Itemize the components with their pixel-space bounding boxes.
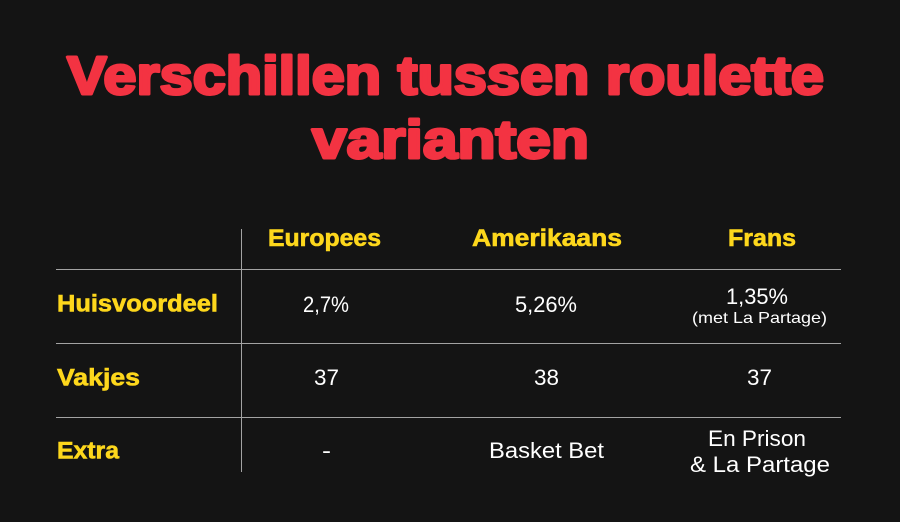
row: vakjes values: 37 xyxy=(314,365,339,390)
row: huisvoordeel values xyxy=(303,284,827,327)
row: huisvoordeel values: 5,26% xyxy=(515,292,577,317)
row labels: Vakjes xyxy=(57,364,140,392)
row labels xyxy=(57,290,218,464)
column headers: Amerikaans xyxy=(472,225,622,252)
column headers xyxy=(268,225,796,252)
row: huisvoordeel values: 1,35% xyxy=(726,284,788,309)
title xyxy=(67,46,824,170)
row: huisvoordeel values: 2,7% xyxy=(303,292,349,317)
row: vakjes values xyxy=(314,365,772,390)
row: extra values: - xyxy=(322,438,331,463)
row: huisvoordeel values: (met La Partage) xyxy=(692,310,827,327)
column headers: Europees xyxy=(268,225,381,252)
title: Verschillen tussen roulette xyxy=(67,46,824,106)
row labels: Huisvoordeel xyxy=(57,290,218,318)
row labels: Extra xyxy=(57,438,120,464)
column headers: Frans xyxy=(728,225,796,252)
row: extra values: En Prison xyxy=(708,426,806,451)
row: vakjes values: 38 xyxy=(534,365,559,390)
row: extra values xyxy=(322,426,830,477)
title: varianten xyxy=(312,110,589,170)
row: vakjes values: 37 xyxy=(747,365,772,390)
row: extra values: Basket Bet xyxy=(489,438,604,463)
table grid xyxy=(56,229,841,472)
row: extra values: & La Partage xyxy=(690,452,830,477)
